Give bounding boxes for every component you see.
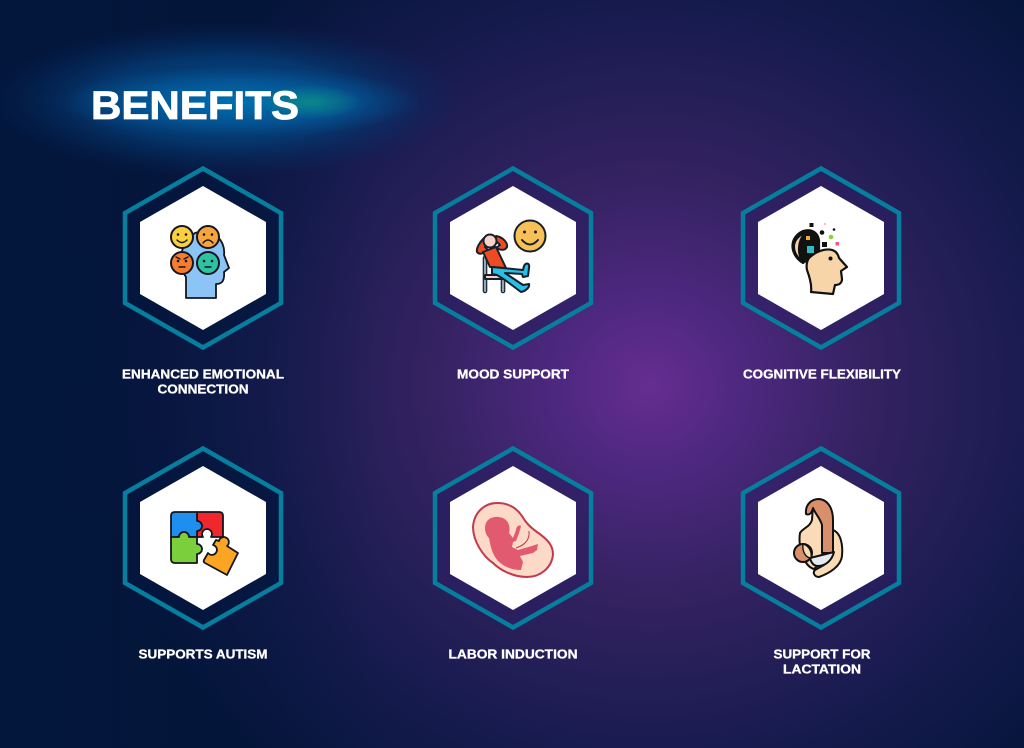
icon: relaxed person with smiley — [477, 220, 546, 292]
label: supports autism: SUPPORTS AUTISM — [138, 648, 268, 662]
label: support for lactation — [774, 648, 870, 676]
label: enhanced emotional connection: CONNECTION — [158, 382, 248, 396]
panel: support for lactation — [743, 448, 899, 628]
hexagon frame — [125, 168, 281, 348]
label: support for lactation: LACTATION — [783, 662, 861, 676]
label: mood support: MOOD SUPPORT — [457, 368, 569, 382]
panel: enhanced emotional connection — [125, 168, 281, 348]
panel: mood support — [435, 168, 591, 348]
label: enhanced emotional connection: ENHANCED EMOTIONAL — [122, 368, 284, 382]
hexagon frame — [125, 448, 281, 628]
hexagon white — [140, 466, 266, 610]
panel: cognitive flexibility — [743, 168, 899, 348]
hexagon frame — [435, 448, 591, 628]
icon: head with emotion faces — [171, 226, 229, 298]
hexagon frame — [743, 168, 899, 348]
panel: labor induction — [435, 448, 591, 628]
hexagon white — [450, 186, 576, 330]
label: cognitive flexibility: COGNITIVE FLEXIBILITY — [743, 368, 902, 382]
title: BENEFITS — [91, 84, 299, 128]
hexagon white — [758, 466, 884, 610]
hexagon white — [450, 466, 576, 610]
hexagon white — [140, 186, 266, 330]
panel: supports autism — [125, 448, 281, 628]
label: enhanced emotional connection — [122, 368, 284, 396]
hexagon frame — [743, 448, 899, 628]
icon: fetus in womb — [473, 503, 553, 577]
hexagon white — [758, 186, 884, 330]
hexagon frame — [435, 168, 591, 348]
icon: puzzle pieces — [171, 512, 238, 575]
icon: open head with sparks — [792, 223, 847, 294]
icon: breastfeeding mother — [794, 499, 842, 577]
label: support for lactation: SUPPORT FOR — [774, 648, 870, 662]
label: labor induction: LABOR INDUCTION — [448, 648, 578, 662]
